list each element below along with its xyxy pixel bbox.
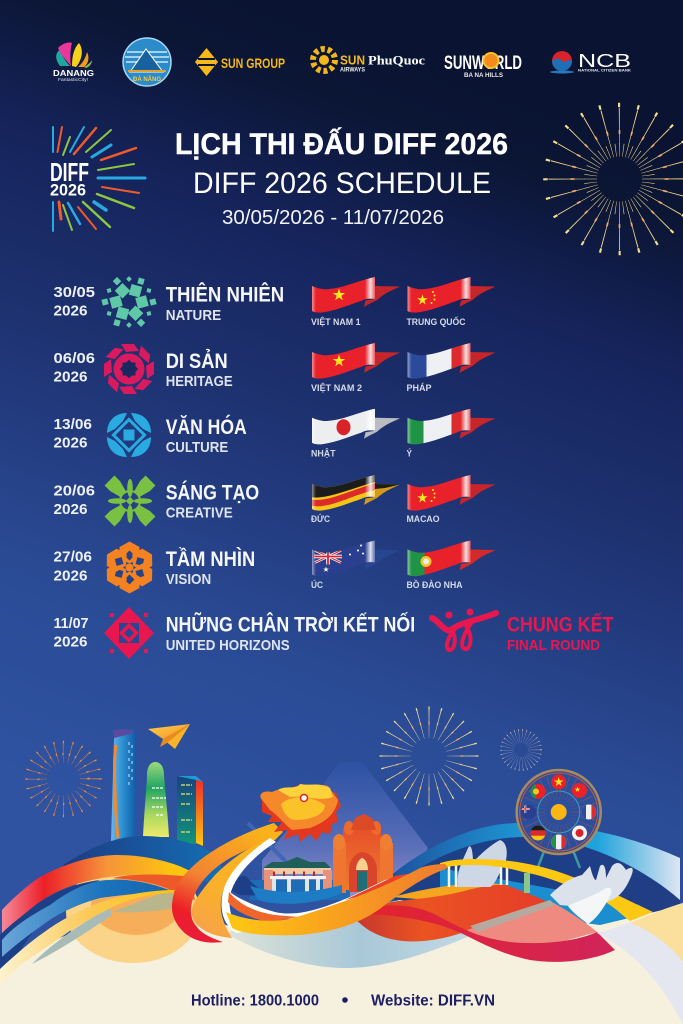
wheel flag: Italy xyxy=(551,834,567,850)
flag: Phap xyxy=(406,341,496,394)
DIFF 2026 logo: 2026 xyxy=(50,180,86,200)
icon: nature emblem xyxy=(99,276,159,328)
date: 30/05 xyxy=(54,284,95,301)
date: 11/07 xyxy=(54,615,88,632)
firework: left orange xyxy=(26,742,100,816)
firework: centre gold xyxy=(381,708,477,804)
icon: vision emblem xyxy=(102,542,157,594)
icon: culture emblem xyxy=(107,413,151,457)
row 6: final xyxy=(54,607,614,659)
website: Website: DIFF.VN xyxy=(371,992,495,1010)
logo: NCB: NATIONAL CITIZEN BANK xyxy=(578,68,632,72)
logo: Sun World Ba Na Hills xyxy=(444,53,522,79)
theme subtitle: CULTURE xyxy=(166,439,228,456)
date: 2026 xyxy=(54,369,88,386)
ferris wheel xyxy=(517,770,601,893)
DIFF 2026 logo: DIFF xyxy=(50,157,89,187)
logo: Da Nang city: DANANG xyxy=(53,68,94,78)
logo: Sun PhuQuoc Airways xyxy=(313,49,426,74)
theme subtitle: UNITED HORIZONS xyxy=(166,637,290,654)
logo: Sun Group: SUN GROUP xyxy=(221,55,285,71)
date xyxy=(54,416,92,452)
theme subtitle: VISION xyxy=(166,571,211,588)
date: 27/06 xyxy=(54,549,92,566)
title: Vietnamese: LỊCH THI ĐẤU DIFF 2026 xyxy=(175,127,508,161)
ribbon: main yellow xyxy=(226,864,448,935)
flag: Y xyxy=(406,407,496,460)
theme name: NHỮNG CHÂN TRỜI KẾT NỐI xyxy=(166,612,415,636)
firework: top right xyxy=(546,105,683,253)
flag: Duc: ĐỨC xyxy=(311,513,330,525)
logo: Da Nang city xyxy=(53,43,94,82)
firework: small xyxy=(501,730,541,770)
logo: NCB: NCB xyxy=(578,51,631,71)
theme name: DI SẢN xyxy=(166,350,228,373)
date: 2026 xyxy=(54,303,88,320)
date: 2026 xyxy=(54,435,88,452)
row 4: Sang Tao xyxy=(54,471,496,526)
hand: white cuff xyxy=(568,888,612,924)
flag: Uc: ÚC xyxy=(311,579,323,591)
building: green tower xyxy=(143,762,169,837)
ribbon: big swoosh xyxy=(172,823,283,943)
date xyxy=(54,350,95,386)
date: 06/06 xyxy=(54,350,95,367)
row 3: Van Hoa xyxy=(54,407,496,460)
ribbon: right orange-red blob xyxy=(352,883,597,944)
title block xyxy=(175,127,508,229)
row 5: Tam Nhin xyxy=(54,538,496,594)
ribbon: dark navy xyxy=(0,880,100,985)
logo: Sun World Ba Na Hills: BA NA HILLS xyxy=(464,72,504,79)
building: tall tower xyxy=(111,729,135,841)
logo: NCB xyxy=(550,51,632,74)
date: 13/06 xyxy=(54,416,92,433)
ribbon: white stripe and red tail xyxy=(222,838,431,933)
temple tower xyxy=(333,814,393,893)
final round label: CHUNG KẾT xyxy=(507,614,614,636)
ribbon: golden bridge xyxy=(440,859,653,921)
bridge posts xyxy=(449,864,507,887)
flag: Macao: MACAO xyxy=(406,514,440,525)
mountain xyxy=(248,762,428,900)
logo: Sun World Ba Na Hills: SUNWORLD xyxy=(444,53,522,74)
ground xyxy=(0,900,683,1024)
wheel flag: Viet Nam xyxy=(551,774,566,790)
ribbon: swoosh inner band xyxy=(192,832,283,938)
hotline: Hotline: 1800.1000 xyxy=(191,992,319,1010)
final round label xyxy=(507,614,614,654)
wheel flag: Australia xyxy=(521,804,537,820)
flag: Viet Nam 2 xyxy=(311,341,400,394)
subtitle: English: DIFF 2026 SCHEDULE xyxy=(193,167,491,200)
theme subtitle: HERITAGE xyxy=(166,373,233,390)
wheel flag: China xyxy=(572,783,587,798)
right hill xyxy=(383,823,680,930)
theme name: SÁNG TẠO xyxy=(166,482,259,504)
pagoda: covered bridge xyxy=(250,857,350,900)
theme subtitle: CREATIVE xyxy=(166,505,233,522)
left peach circles xyxy=(66,861,200,963)
date xyxy=(54,482,95,518)
icon: heritage emblem xyxy=(104,344,154,394)
theme name: TẦM NHÌN xyxy=(166,548,255,571)
logo: Sun Group xyxy=(195,48,285,76)
date: 20/06 xyxy=(54,482,95,500)
logo: Sun PhuQuoc Airways: SUN xyxy=(340,54,365,68)
wheel flag: Germany xyxy=(530,826,546,840)
flag: Macao xyxy=(407,475,496,522)
flag: Viet Nam 2: VIỆT NAM 2 xyxy=(311,382,362,394)
flag: Nhat xyxy=(311,407,400,460)
icon: creative emblem xyxy=(105,476,155,526)
grey wedge xyxy=(32,908,112,964)
flag: Viet Nam 1 xyxy=(311,275,400,328)
icon: paper plane xyxy=(148,724,190,749)
illustration: skyline and ribbons xyxy=(0,708,683,1024)
date range: 30/05/2026 - 11/07/2026 xyxy=(222,206,444,229)
theme name: THIÊN NHIÊN xyxy=(166,283,284,307)
logo: Da Nang city: FantasticCity! xyxy=(58,77,88,82)
flag: Phap: PHÁP xyxy=(406,383,432,394)
footer contact line xyxy=(191,992,495,1010)
schedule rows xyxy=(54,275,614,659)
ribbon: left orange xyxy=(2,855,192,933)
logo: Sun PhuQuoc Airways: PhuQuoc xyxy=(368,54,426,68)
date: 2026 xyxy=(54,567,88,584)
flag: Bo Dao Nha: BỒ ĐÀO NHA xyxy=(406,579,463,591)
ribbon: crimson xyxy=(352,905,615,962)
flag: Viet Nam 1: VIỆT NAM 1 xyxy=(311,316,361,328)
wheel flag: Japan xyxy=(572,826,587,840)
date: 2026 xyxy=(54,634,88,651)
date xyxy=(54,284,95,320)
logo: Sun PhuQuoc Airways: AIRWAYS xyxy=(340,68,365,74)
hand: left xyxy=(458,840,507,887)
theme subtitle: NATURE xyxy=(166,307,221,324)
ribbon: left blue xyxy=(2,880,173,957)
left hill xyxy=(63,836,230,890)
icon: united horizons emblem xyxy=(104,607,154,659)
date xyxy=(54,615,88,651)
sponsor logos row xyxy=(53,38,632,86)
centre soft wave xyxy=(224,905,495,968)
flag: Duc xyxy=(311,475,400,522)
logo: Da Nang emblem: ĐÀ NẴNG xyxy=(133,76,161,83)
separator dot xyxy=(342,997,348,1003)
flag: Uc xyxy=(312,540,400,588)
date: 2026 xyxy=(54,501,88,518)
building: Novotel tower xyxy=(177,776,203,846)
date xyxy=(54,549,92,584)
ribbon: loop interior navy and blue xyxy=(226,876,342,904)
ribbon: red streak xyxy=(113,874,195,900)
flag: Trung Quoc xyxy=(406,275,496,328)
dragon head xyxy=(260,784,341,842)
row 2: Di San xyxy=(54,341,496,394)
wheel flag: Portugal xyxy=(530,784,546,799)
row 1: Thien Nhien xyxy=(54,275,496,328)
theme name: VĂN HÓA xyxy=(166,415,247,439)
DIFF 2026 logo xyxy=(50,127,145,231)
flag: Trung Quoc: TRUNG QUỐC xyxy=(406,316,466,328)
logo: Da Nang emblem xyxy=(123,38,171,86)
ribbon: left yellow xyxy=(0,890,175,985)
flag: Y: Ý xyxy=(406,448,413,460)
flag: Nhat: NHẬT xyxy=(311,448,336,460)
flag: Bo Dao Nha xyxy=(407,540,496,588)
icon: final round figures xyxy=(432,608,496,650)
hand: right pale xyxy=(550,863,633,908)
wheel flag: France xyxy=(581,804,597,820)
ribbon: right grey band xyxy=(597,903,683,1024)
final round label: FINAL ROUND xyxy=(507,637,600,654)
